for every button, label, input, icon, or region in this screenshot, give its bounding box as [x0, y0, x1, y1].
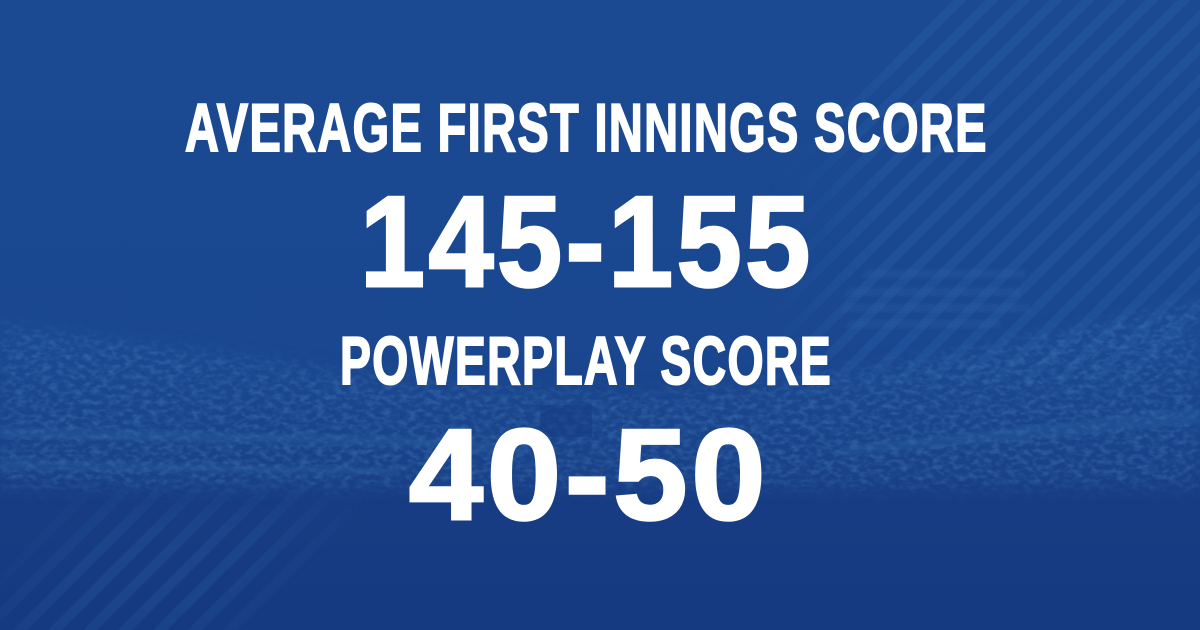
- heading: average first innings score: AVERAGE FIRST INNINGS SCORE: [185, 90, 988, 166]
- number: powerplay score range: 40-50: [409, 403, 769, 547]
- heading: powerplay score: POWERPLAY SCORE: [340, 323, 832, 399]
- number: first innings score range: 145-155: [360, 170, 814, 314]
